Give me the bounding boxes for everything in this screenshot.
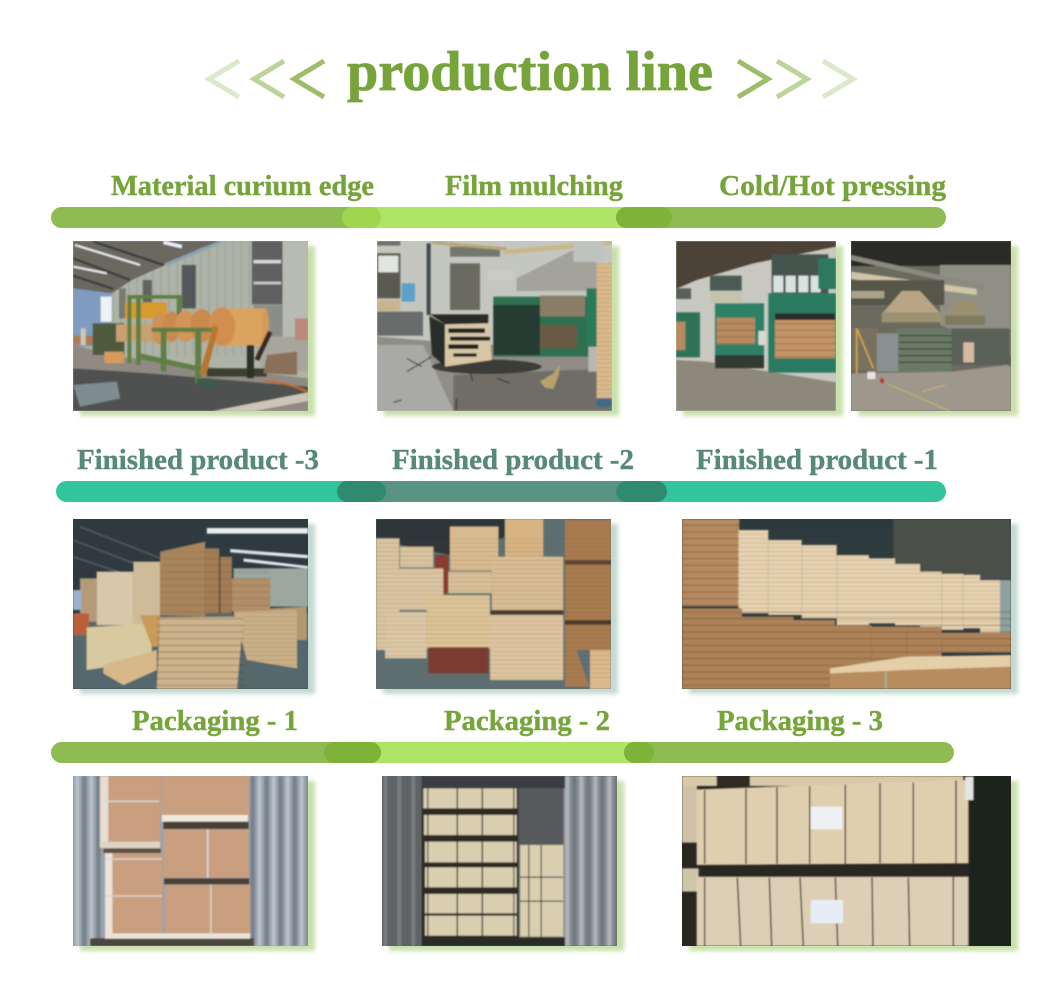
step labels row 2: Finished product -1 bbox=[696, 445, 938, 476]
photo: cold press bbox=[676, 241, 843, 416]
step labels row 1: Cold/Hot pressing bbox=[719, 171, 946, 202]
step labels row 3: Packaging - 3 bbox=[717, 706, 883, 737]
progress bar row 2 bbox=[56, 481, 946, 502]
step labels row 3 bbox=[132, 706, 883, 737]
panel: row 1 pressing steps bbox=[51, 171, 1018, 416]
photo: hot press bbox=[851, 241, 1018, 416]
progress bar row 1 bbox=[51, 207, 946, 228]
step labels row 1: Material curium edge bbox=[111, 171, 374, 202]
step labels row 3: Packaging - 1 bbox=[132, 706, 298, 737]
photo: stacked plywood crates bbox=[682, 776, 1018, 951]
photo: film mulching press bbox=[377, 241, 619, 416]
photo: veneer rolls on machine bbox=[73, 241, 315, 416]
step labels row 1: Film mulching bbox=[445, 171, 623, 202]
step labels row 2 bbox=[77, 445, 938, 476]
icon: left chevrons bbox=[209, 61, 324, 97]
photo: container with crates bbox=[382, 776, 624, 951]
photo: container with boards bbox=[73, 776, 315, 951]
panel: row 3 packaging bbox=[51, 706, 1018, 951]
progress bar row 3 bbox=[51, 742, 954, 763]
photo: finished stacks 3 bbox=[73, 519, 315, 694]
title bbox=[209, 41, 853, 103]
step labels row 3: Packaging - 2 bbox=[444, 706, 610, 737]
step labels row 2: Finished product -2 bbox=[392, 445, 634, 476]
step labels row 1 bbox=[111, 171, 946, 202]
photo: finished stacks 1 bbox=[682, 519, 1018, 694]
heading: production line: production line bbox=[347, 41, 713, 103]
panel: row 2 finished product bbox=[56, 445, 1018, 694]
photo: finished stacks 2 bbox=[376, 519, 618, 694]
icon: right chevrons bbox=[738, 61, 853, 97]
step labels row 2: Finished product -3 bbox=[77, 445, 319, 476]
